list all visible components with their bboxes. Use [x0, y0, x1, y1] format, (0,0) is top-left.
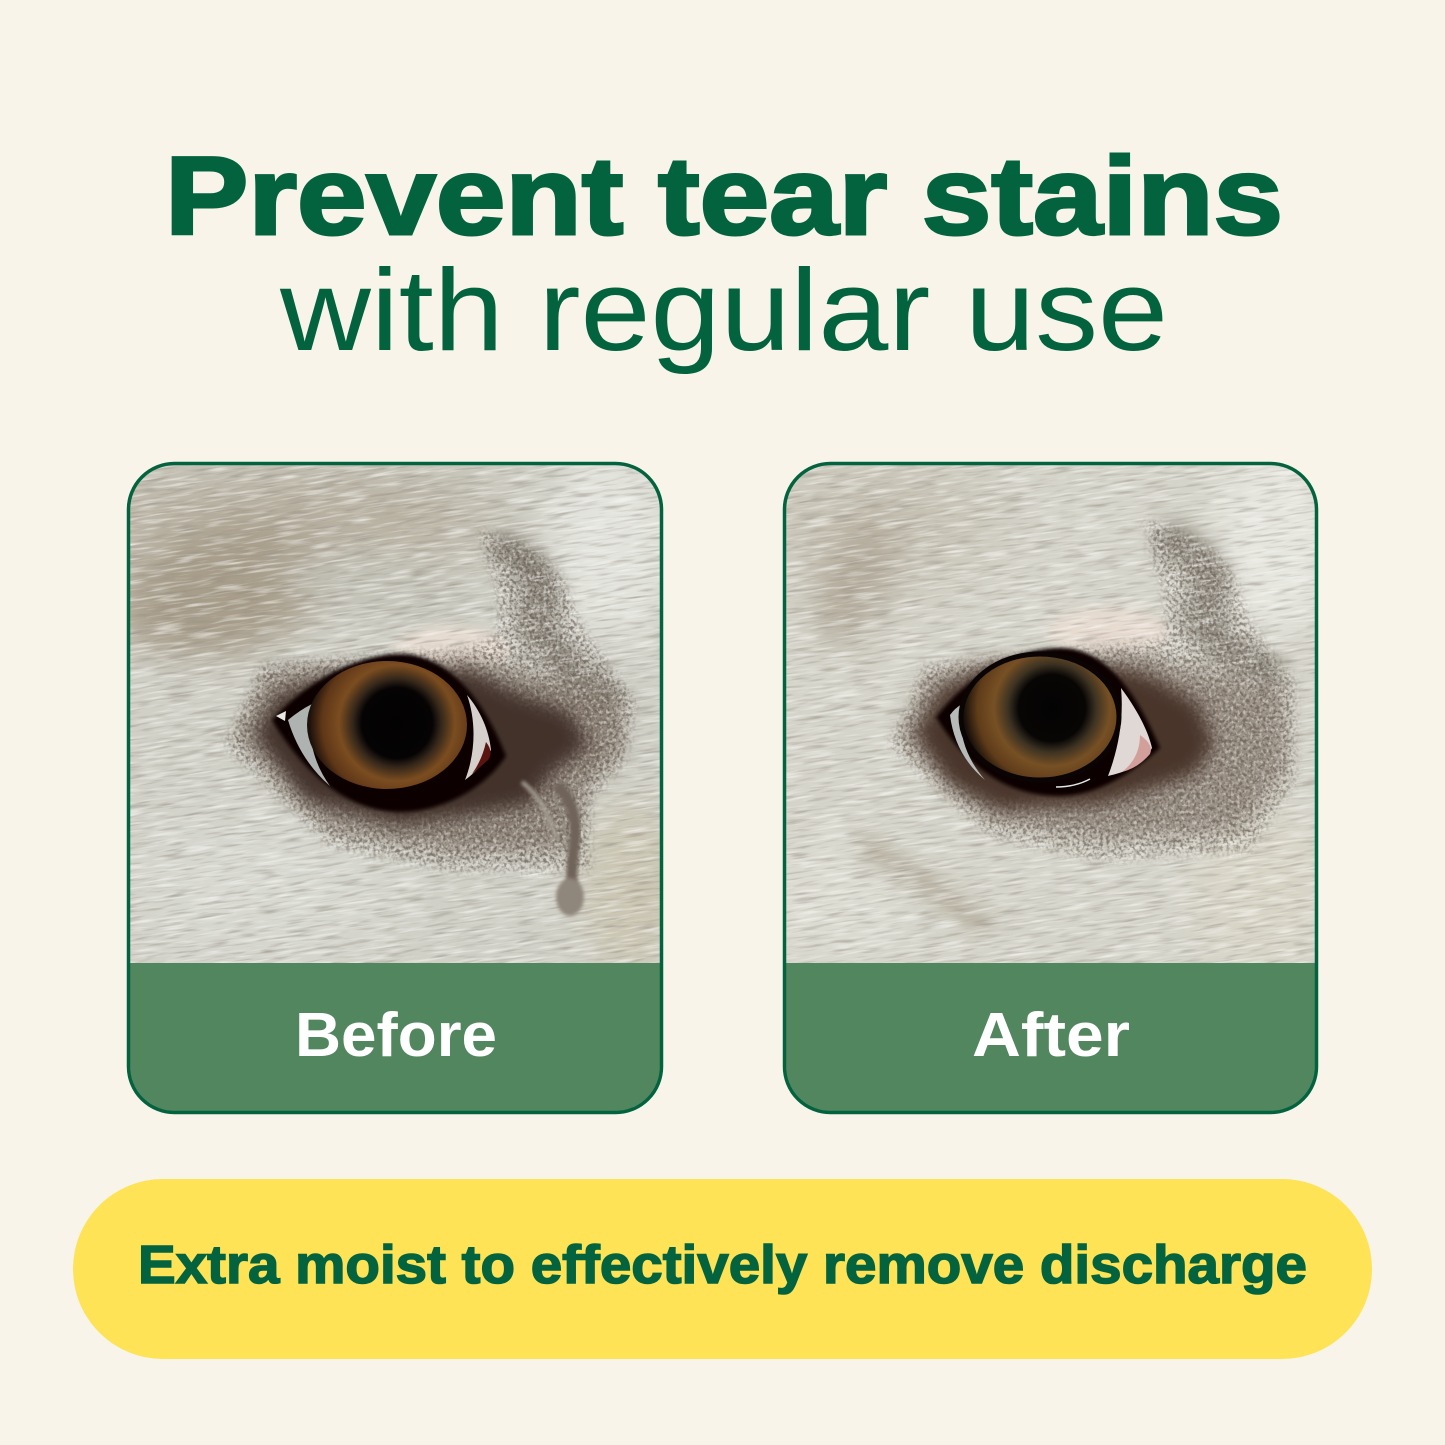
title: [165, 135, 1283, 375]
panel: after: [782, 462, 1318, 1114]
before label: Before: [295, 1001, 497, 1070]
after photo: clean dog eye: [786, 465, 1315, 963]
callout pill: [73, 1179, 1372, 1359]
before frame: [128, 464, 662, 1112]
before photo: dog eye with tear stain: [130, 465, 660, 963]
heading: with regular use: with regular use: [279, 245, 1168, 375]
heading: prevent tear stains: Prevent tear stains: [165, 135, 1283, 258]
callout text: Extra moist to effectively remove discharge: [138, 1235, 1307, 1295]
panel: before: [126, 462, 664, 1114]
after label: After: [972, 1001, 1130, 1070]
after frame: [784, 464, 1316, 1112]
after label band: [786, 963, 1315, 1111]
before label band: [130, 963, 660, 1111]
